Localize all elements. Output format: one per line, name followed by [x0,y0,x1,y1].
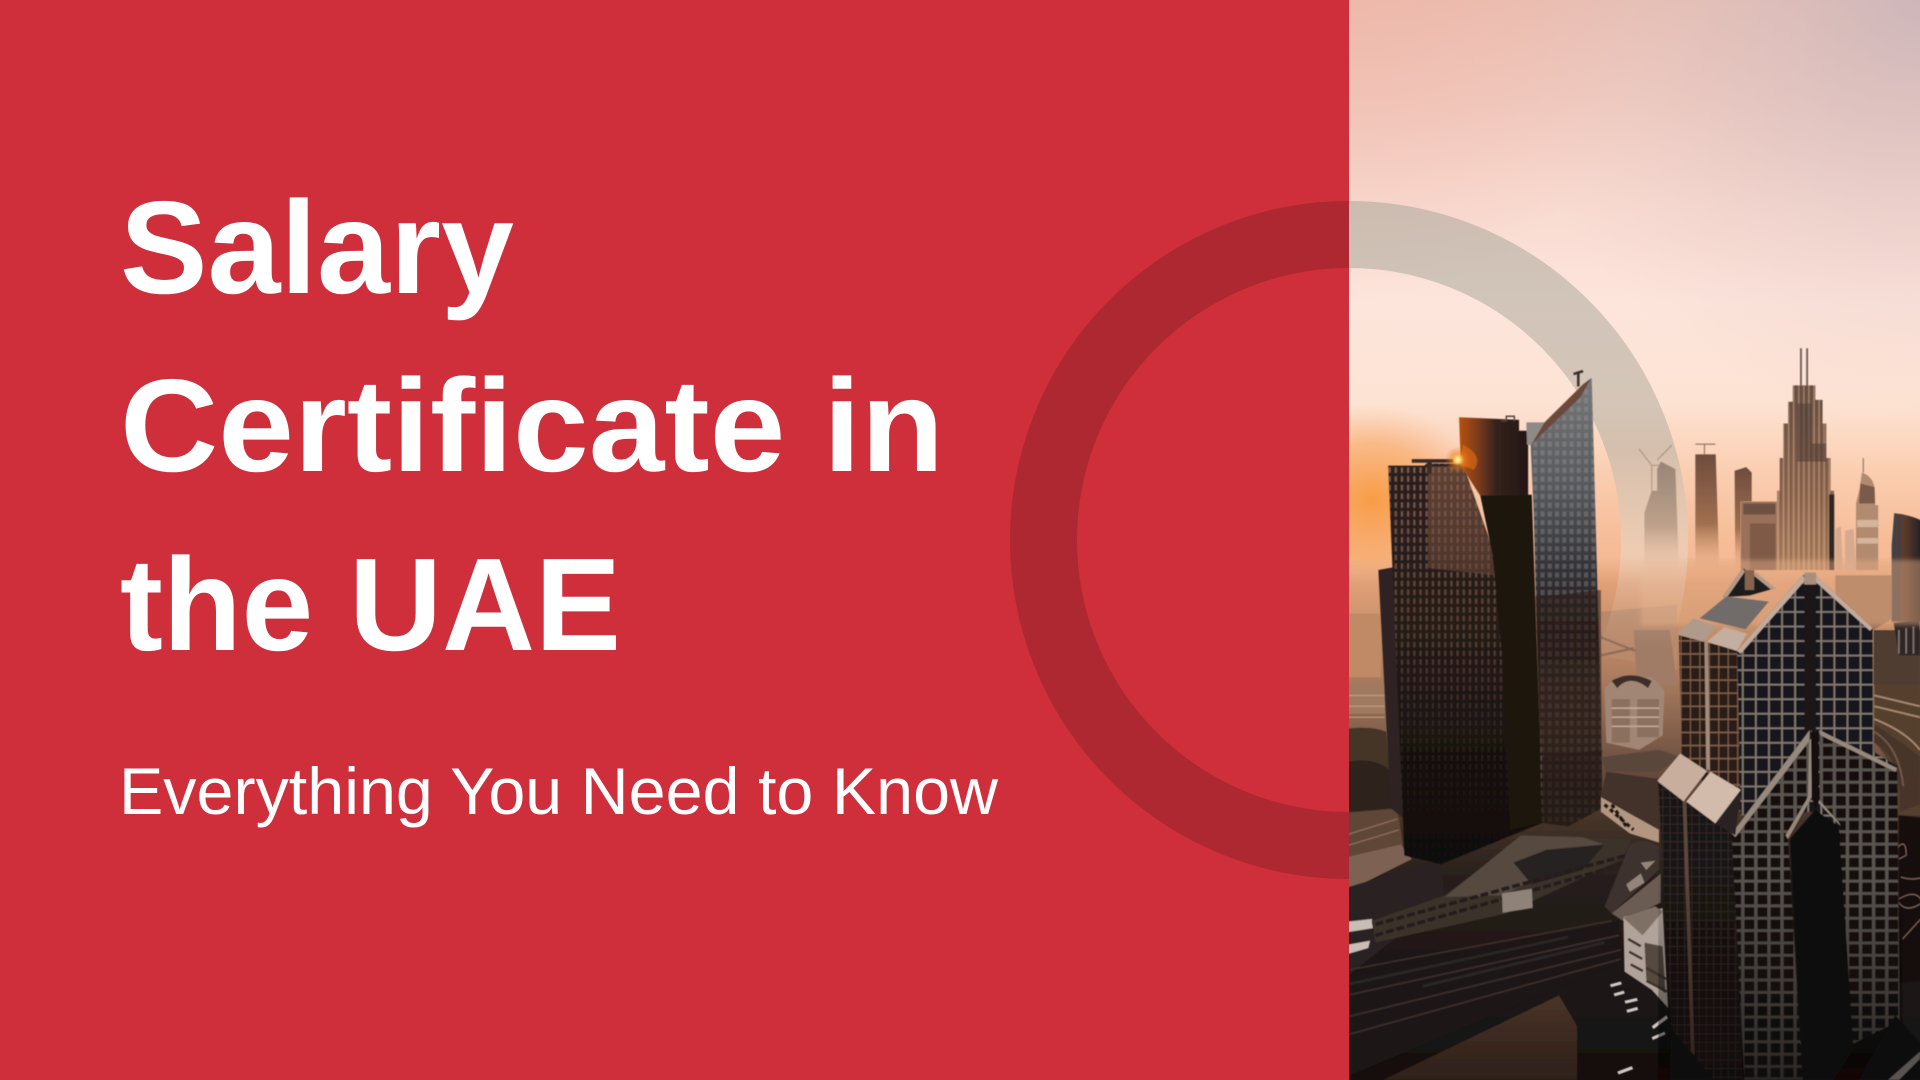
slatted roof [1700,597,1769,629]
swirl garden at right [1897,815,1920,983]
glass right tower [1531,378,1602,826]
ring on red panel [1044,234,1654,846]
domed hotel [1604,675,1664,750]
narrow tower [1735,467,1752,570]
right face lattice [1737,575,1899,1041]
middle ground buildings and roads [1339,675,1920,1080]
panel: city skyline photo [1349,0,1920,1080]
title line 2: Certificate in [120,352,944,499]
far rear peak [1723,568,1775,597]
foreground tower [1657,568,1920,1080]
pale lower roof caps [1657,754,1707,802]
panel: red title panel [0,0,1349,1080]
sunset sky [1349,0,1920,582]
glass tower roof and mast [1526,422,1544,445]
podium roof [1372,835,1632,943]
tower with crane [1638,444,1678,556]
glowing upper block [1459,417,1528,495]
tower dark base [1670,1015,1920,1080]
dark plaza and sand road [1601,750,1681,772]
sun flare [1461,445,1477,470]
white low building [1623,906,1668,1008]
main lit tower body [1388,463,1543,864]
lit sand lot [1383,995,1577,1080]
dark central shaft [1480,495,1543,830]
subtitle: Everything You Need to Know [119,754,998,828]
highway [1339,921,1621,1080]
distant towers skyline [1639,348,1920,625]
left twin tower [1378,371,1602,864]
title line 1: Salary [120,174,514,321]
low haze band [1641,560,1920,625]
dark curved tower at right [1892,513,1920,622]
pale roof caps [1677,618,1716,642]
curved plaza [1604,841,1659,914]
small hazy towers [1835,526,1856,570]
upper left face with warm reflection [1679,635,1741,812]
hotel block [1741,502,1777,570]
stepped supertall tower [1777,348,1834,570]
ring overlay on photo [1349,201,1688,624]
hazy ground [1339,557,1920,1080]
title [120,174,944,678]
lower chevron lattices [1732,730,1812,1080]
side wing [1378,567,1405,819]
title line 3: the UAE [120,531,621,678]
tall midrise tower [1695,444,1719,570]
parking with cars [1610,981,1815,1075]
curved crown tower [1856,458,1878,570]
black central panel [1790,810,1853,1080]
lower left face [1658,783,1743,1080]
